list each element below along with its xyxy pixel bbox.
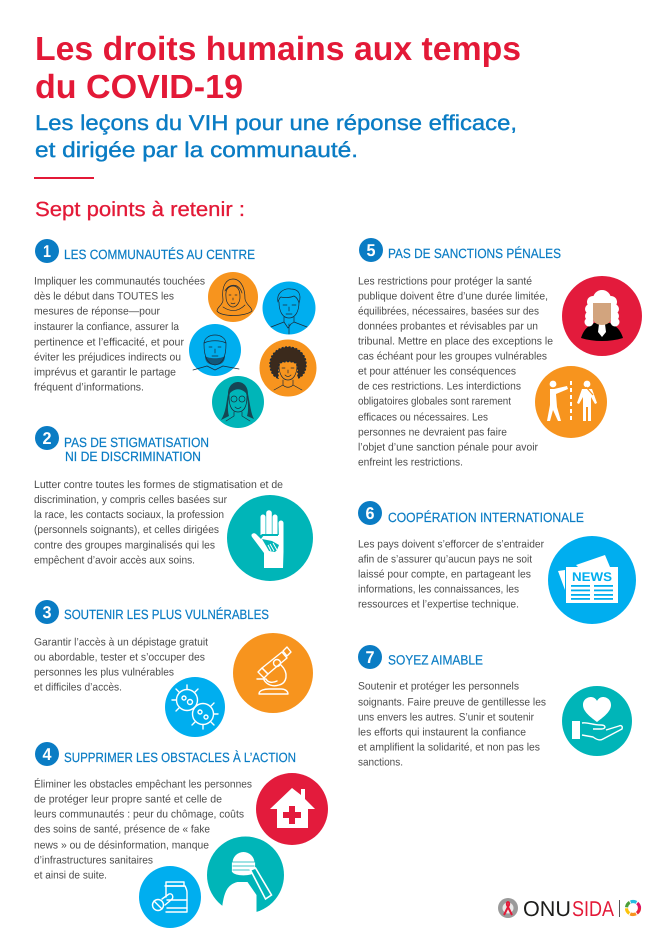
heading 2 bbox=[64, 435, 209, 464]
text 3: ou abordable, tester et s’occuper des bbox=[34, 652, 206, 664]
text 6: afin de s’assurer qu’aucun pays ne soit bbox=[358, 554, 532, 566]
text 6: laissé pour compte, en partageant les bbox=[358, 568, 532, 580]
text 6: Les pays doivent s’efforcer de s’entraider bbox=[358, 538, 544, 550]
text 1: fréquent d’informations. bbox=[34, 382, 144, 394]
text 7: uns envers les autres. S’unir et soutenir bbox=[358, 712, 534, 724]
text 4: et ainsi de suite. bbox=[34, 870, 107, 882]
text 7 bbox=[358, 680, 547, 768]
logo: ONUSIDA bbox=[498, 897, 640, 921]
divider bbox=[619, 900, 620, 917]
icon: woman with glasses bbox=[212, 376, 264, 428]
icon: medicine and pills bbox=[139, 866, 201, 928]
text 5: équilibrées, nécessaires, basées sur des bbox=[358, 306, 540, 318]
text 1: dès le début dans TOUTES les bbox=[34, 290, 175, 302]
panel: point 3 bbox=[34, 600, 313, 737]
title: du COVID-19 bbox=[35, 69, 243, 106]
heading 5: PAS DE SANCTIONS PÉNALES bbox=[388, 246, 561, 261]
text 5: Les restrictions pour protéger la santé bbox=[358, 276, 532, 288]
icon: raised hands bbox=[227, 495, 313, 581]
text 4: des soins de santé, présence de « fake bbox=[34, 824, 210, 836]
title: Les droits humains aux temps bbox=[35, 31, 521, 68]
panel: point 4 bbox=[34, 742, 328, 928]
number 6 bbox=[358, 501, 382, 525]
icon: person with mask bbox=[206, 836, 286, 916]
text 5: l’objet d’une sanction pénale pour avoir bbox=[358, 442, 538, 454]
text 7: sanctions. bbox=[358, 756, 403, 768]
text 4: de protéger leur propre santé et celle de bbox=[34, 794, 222, 806]
number 7: 7 bbox=[366, 648, 374, 667]
icon: man with short hair bbox=[262, 282, 316, 334]
number 6: 6 bbox=[366, 504, 374, 523]
text 1: instaurer la confiance, assurer la bbox=[34, 321, 179, 333]
text 5: cas échéant pour les groupes vulnérables bbox=[358, 350, 548, 362]
text 2 bbox=[34, 479, 283, 566]
number 3: 3 bbox=[42, 603, 52, 622]
number 4: 4 bbox=[42, 745, 52, 764]
text 6 bbox=[358, 538, 544, 610]
heading 6: COOPÉRATION INTERNATIONALE bbox=[388, 510, 584, 525]
number 1: 1 bbox=[43, 242, 51, 261]
text 2: discrimination, y compris celles basées sur bbox=[34, 494, 227, 506]
text 2: empêchent d’avoir accès aux soins. bbox=[34, 554, 195, 566]
text 3 bbox=[34, 636, 208, 694]
icon: microscope bbox=[233, 633, 313, 713]
panel: point 2 bbox=[34, 426, 313, 581]
heading 2: NI DE DISCRIMINATION bbox=[65, 449, 201, 464]
subtitle: Les leçons du VIH pour une réponse efficace, bbox=[35, 111, 517, 135]
icon: hand holding heart bbox=[562, 686, 632, 756]
SDG wheel bbox=[626, 902, 640, 914]
text 4: news » ou de désinformation, manque bbox=[34, 840, 209, 852]
text 1 bbox=[34, 276, 206, 394]
icon: woman with headscarf bbox=[208, 272, 258, 322]
icon: house with cross bbox=[256, 773, 328, 845]
text 5: publique doivent être d’une durée limitée, bbox=[358, 290, 548, 302]
wordmark: ONU bbox=[523, 897, 571, 921]
text 3: Garantir l’accès à un dépistage gratuit bbox=[34, 636, 208, 648]
panel: point 7 bbox=[358, 645, 632, 768]
text 2: contre des groupes marginalisés qui les bbox=[34, 540, 216, 552]
wordmark: SIDA bbox=[572, 897, 615, 921]
icon: viruses bbox=[165, 677, 225, 737]
icon: physical distancing bbox=[535, 366, 607, 438]
text 2: la race, les contacts sociaux, la profession bbox=[34, 509, 224, 521]
heading: seven points: Sept points à retenir : bbox=[35, 198, 245, 221]
number 3 bbox=[35, 600, 59, 624]
text 4 bbox=[34, 778, 253, 882]
text 7: soignants. Faire preuve de gentillesse les bbox=[358, 696, 547, 708]
text 7: les efforts qui instaurent la confiance bbox=[358, 726, 526, 738]
text 3: personnes les plus vulnérables bbox=[34, 666, 175, 678]
text 5: et pour atténuer les conséquences bbox=[358, 366, 517, 378]
number 1 bbox=[35, 239, 59, 263]
panel: point 1 bbox=[34, 239, 316, 428]
text 5: données probantes et révisables par un bbox=[358, 320, 538, 332]
number 2: 2 bbox=[42, 429, 52, 448]
text 5 bbox=[358, 276, 553, 468]
icon: newspaper: NEWS bbox=[572, 570, 612, 584]
text 5: obligatoires globales sont rarement bbox=[358, 396, 511, 408]
text 3: et difficiles d’accès. bbox=[34, 682, 122, 694]
text 5: de ces restrictions. Les interdictions bbox=[358, 380, 522, 392]
heading 7: SOYEZ AIMABLE bbox=[388, 652, 483, 668]
text 5: efficaces ou nécessaires. Les bbox=[358, 412, 489, 424]
panel: point 6 bbox=[358, 501, 636, 624]
text 5: personnes ne devraient pas faire bbox=[358, 426, 507, 438]
title bbox=[35, 31, 521, 106]
text 7: et amplifient la solidarité, et non pas les bbox=[358, 742, 541, 754]
icon: newspaper bbox=[548, 536, 636, 624]
text 1: Impliquer les communautés touchées bbox=[34, 276, 206, 288]
wordmark bbox=[523, 897, 615, 921]
text 6: ressources et l’expertise technique. bbox=[358, 598, 519, 610]
icon: woman with afro bbox=[260, 340, 316, 396]
subtitle: et dirigée par la communauté. bbox=[35, 138, 358, 162]
number 5 bbox=[359, 238, 383, 262]
icon: judge bbox=[562, 276, 642, 356]
text 5: tribunal. Mettre en place des exceptions le bbox=[358, 336, 553, 348]
number 5: 5 bbox=[366, 241, 376, 260]
subtitle bbox=[35, 111, 517, 162]
heading 4: SUPPRIMER LES OBSTACLES À L’ACTION bbox=[64, 750, 296, 765]
text 7: Soutenir et protéger les personnels bbox=[358, 680, 520, 692]
number 2 bbox=[35, 426, 59, 450]
heading 1: LES COMMUNAUTÉS AU CENTRE bbox=[64, 247, 255, 262]
text 1: imprévus et garantir le partage bbox=[34, 366, 176, 378]
panel: point 5 bbox=[358, 238, 642, 468]
text 5: enfreint les restrictions. bbox=[358, 456, 463, 468]
text 4: Éliminer les obstacles empêchant les personnes bbox=[34, 778, 253, 790]
heading 3: SOUTENIR LES PLUS VULNÉRABLES bbox=[64, 607, 269, 622]
heading 2: PAS DE STIGMATISATION bbox=[64, 435, 209, 450]
text 1: mesures de réponse—pour bbox=[34, 306, 160, 318]
text 4: d’infrastructures sanitaires bbox=[34, 854, 154, 866]
text 2: Lutter contre toutes les formes de stigmatisation et de bbox=[34, 479, 283, 491]
text 1: éviter les préjudices indirects ou bbox=[34, 352, 181, 364]
text 2: (personnels soignants), et celles dirigées bbox=[34, 524, 220, 536]
icon: bearded man with cap bbox=[189, 324, 241, 376]
UN emblem with red ribbon bbox=[498, 898, 518, 918]
text 4: leurs communautés : peur du chômage, coûts bbox=[34, 808, 245, 820]
red rule bbox=[34, 177, 94, 179]
number 4 bbox=[35, 742, 59, 766]
text 6: informations, les connaissances, les bbox=[358, 584, 520, 596]
text 1: pertinence et l’efficacité, et pour bbox=[34, 336, 184, 348]
number 7 bbox=[358, 645, 382, 669]
